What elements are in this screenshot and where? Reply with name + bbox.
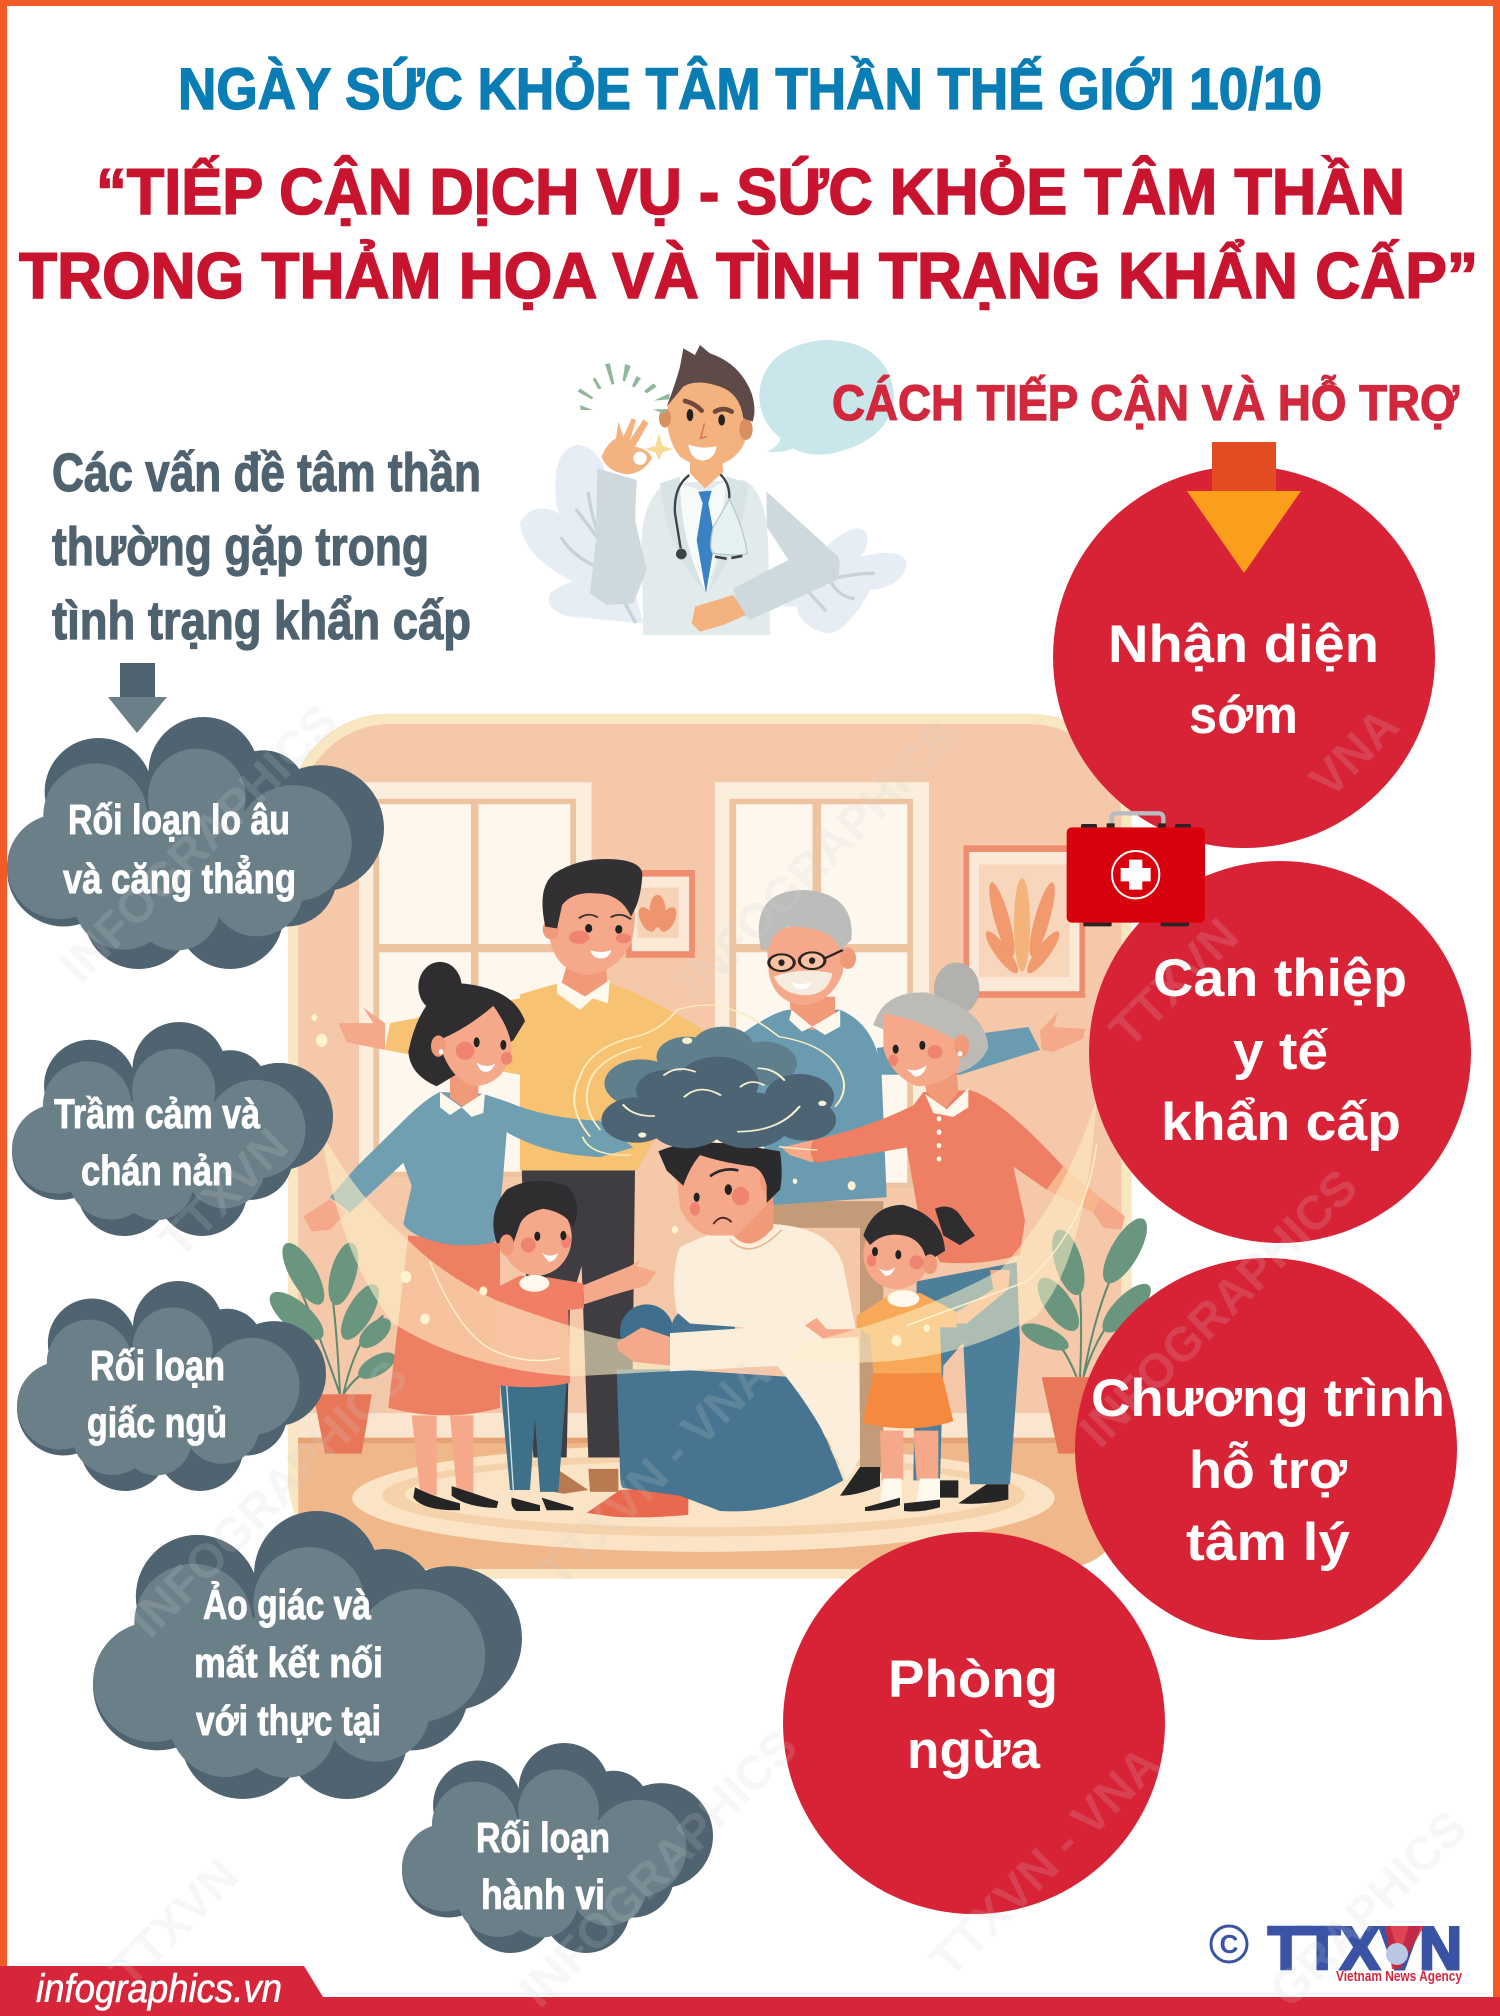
cloud: hallucination: mất kết nối bbox=[194, 1639, 383, 1686]
cloud: sleep disorders bbox=[17, 1281, 326, 1491]
heading: approaches and support: CÁCH TIẾP CẬN VÀ HỖ TRỢ bbox=[832, 375, 1459, 431]
title: theme bbox=[19, 155, 1478, 312]
circle: psychological support programme: Chương trình bbox=[1091, 1369, 1445, 1428]
cloud: anxiety and stress: Rối loạn lo âu bbox=[68, 796, 290, 843]
person: grandmother bbox=[782, 963, 1125, 1504]
circle: emergency medical intervention bbox=[1089, 861, 1471, 1243]
watermarks: INFOGRAPHICS bbox=[510, 1720, 808, 2016]
cloud: hallucination: với thực tại bbox=[196, 1697, 381, 1744]
watermarks: TTXVN - VNA bbox=[530, 1347, 781, 1598]
arrow: right column down bbox=[1187, 442, 1301, 573]
plants bbox=[263, 1211, 1157, 1454]
watermarks: VNA bbox=[1300, 699, 1409, 808]
circle: early recognition: Nhận diện bbox=[1108, 615, 1379, 674]
watermarks: TTXVN - VNA bbox=[920, 1737, 1171, 1988]
watermarks: TTXVN bbox=[100, 1849, 249, 1998]
cloud: depression bbox=[12, 1022, 333, 1236]
glowing embrace band bbox=[311, 1014, 1097, 1376]
watermarks bbox=[50, 695, 1477, 2016]
title: theme: “TIẾP CẬN DỊCH VỤ - SỨC KHỎE TÂM THẦN bbox=[96, 155, 1405, 228]
cloud: sleep disorders: Rối loạn bbox=[90, 1342, 225, 1389]
arrow: left column down bbox=[108, 663, 167, 733]
circle: prevention: ngừa bbox=[907, 1721, 1041, 1780]
footer site name: infographics.vn bbox=[36, 1967, 282, 2011]
person: distressed son (arm and hand) bbox=[617, 1327, 787, 1371]
circle: early recognition bbox=[1053, 466, 1435, 848]
circle: psychological support programme: hỗ trợ bbox=[1189, 1440, 1347, 1500]
heading: common mental health issues bbox=[52, 443, 481, 651]
circle: emergency medical intervention: Can thiệp bbox=[1153, 949, 1407, 1008]
watermarks: GRAPHICS bbox=[1260, 1801, 1477, 2016]
person: father bbox=[338, 859, 713, 1494]
circle: emergency medical intervention: y tế bbox=[1233, 1022, 1329, 1081]
watermarks: INFOGRAPHICS bbox=[120, 1350, 418, 1648]
watermarks: TTXVN bbox=[150, 1119, 299, 1268]
cloud: behavioural disorders: hành vi bbox=[481, 1871, 605, 1918]
cloud: hallucination bbox=[93, 1511, 522, 1799]
cloud: behavioural disorders bbox=[402, 1743, 713, 1953]
watermarks: TTXVN bbox=[1100, 909, 1249, 1058]
person: boy bbox=[493, 1181, 657, 1511]
illustration: doctor with speech bubble bbox=[520, 340, 907, 635]
circle: early recognition: sớm bbox=[1189, 686, 1298, 745]
cloud: depression: chán nản bbox=[81, 1147, 233, 1194]
circle: emergency medical intervention: khẩn cấp bbox=[1161, 1093, 1401, 1152]
title: theme: TRONG THẢM HỌA VÀ TÌNH TRẠNG KHẨN CẤP” bbox=[19, 239, 1478, 312]
footer bar bbox=[0, 1966, 1500, 2016]
heading: common mental health issues: thường gặp trong bbox=[52, 517, 429, 577]
cloud: depression: Trầm cảm và bbox=[54, 1090, 261, 1137]
heading: common mental health issues: tình trạng khẩn cấp bbox=[52, 591, 471, 651]
person: girl bbox=[805, 1205, 1010, 1511]
watermarks: INFOGRAPHICS bbox=[50, 695, 348, 993]
person: distressed son (body) bbox=[587, 1143, 860, 1517]
logo: TTXVN: C bbox=[1220, 1929, 1239, 1959]
icon: first aid kit bbox=[1067, 813, 1205, 926]
room background bbox=[288, 714, 1132, 1579]
person: grandfather bbox=[743, 890, 1085, 1496]
cloud: anxiety and stress: và căng thẳng bbox=[63, 853, 296, 902]
logo: TTXVN: TTXVN bbox=[1268, 1915, 1462, 1982]
cloud: sleep disorders: giấc ngủ bbox=[87, 1399, 227, 1446]
heading: common mental health issues: Các vấn đề tâm thần bbox=[52, 443, 481, 503]
circle: prevention bbox=[783, 1532, 1165, 1914]
illustration: family supporting a distressed man bbox=[263, 714, 1157, 1579]
circle: psychological support programme bbox=[1075, 1258, 1457, 1640]
circle: prevention: Phòng bbox=[888, 1650, 1058, 1709]
cloud: anxiety and stress bbox=[7, 717, 384, 969]
cloud: hallucination: Ảo giác và bbox=[203, 1580, 372, 1628]
storm cloud above head bbox=[574, 1005, 844, 1155]
logo: TTXVN: Vietnam News Agency bbox=[1336, 1968, 1463, 1985]
person: mother bbox=[303, 962, 633, 1510]
circle: psychological support programme: tâm lý bbox=[1186, 1513, 1351, 1572]
title: event name: NGÀY SỨC KHỎE TÂM THẦN THẾ GIỚI 10/10 bbox=[178, 57, 1322, 122]
watermarks: INFOGRAPHICS bbox=[1070, 1160, 1368, 1458]
cloud: behavioural disorders: Rối loạn bbox=[476, 1814, 610, 1861]
watermarks: INFOGRAPHICS bbox=[670, 710, 968, 1008]
